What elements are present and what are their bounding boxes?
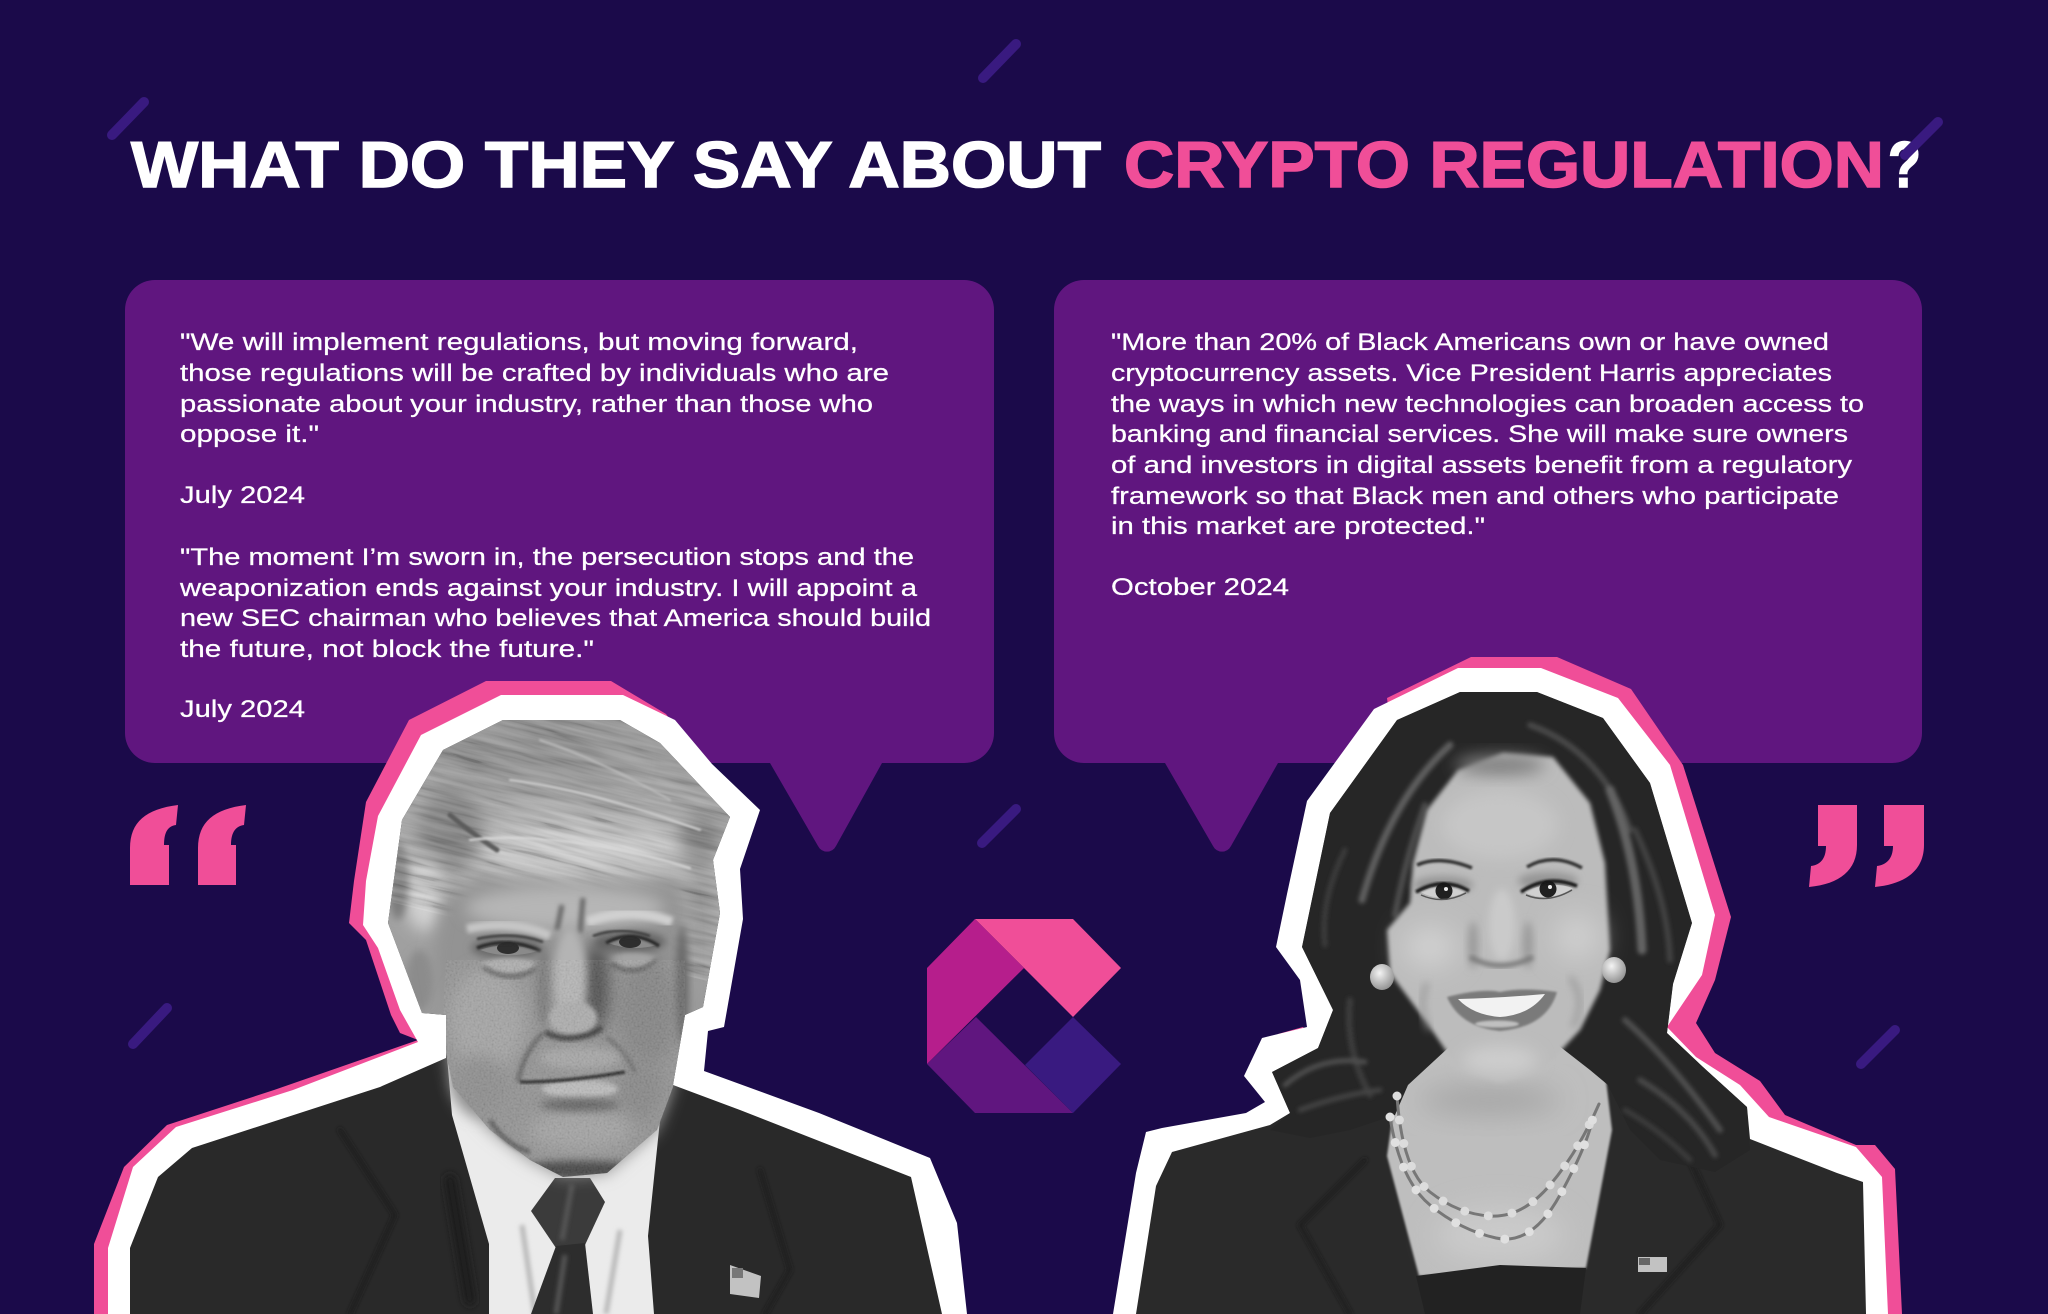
right eye [1518,872,1578,899]
quote text: first statement: those regulations will be crafted by individuals who are [180,360,889,387]
quote text: third statement: "More than 20% of Black Americans own or have owned [1111,329,1829,356]
quote text: third statement: cryptocurrency assets. Vice President Harris appreciates [1111,360,1832,387]
pink offset outline [1278,657,1902,1314]
nose [585,943,609,1031]
quote text: second statement [179,544,931,663]
eye sockets [471,937,543,959]
white sticker outline [1113,668,1888,1314]
quote text: third statement: banking and financial services. She will make sure owners [1111,421,1848,448]
pink offset outline [94,681,700,1314]
title: CRYPTO REGULATION [1124,128,1884,201]
closing quotation mark [1809,805,1924,887]
title: WHAT DO THEY SAY ABOUT [131,128,1101,201]
mouth [540,1047,620,1069]
jacket folds [340,1130,790,1314]
flag pin [730,1265,761,1298]
collar shadows [522,1225,620,1314]
date: July 2024 second: July 2024 [180,696,305,723]
photo: grayscale figure [130,720,942,1314]
quote text: second statement: new SEC chairman who believes that America should build [180,605,931,632]
logo: geometric C mark [927,919,1121,1113]
quote text: third statement [1111,329,1864,540]
face [1387,753,1610,1083]
white sticker outline [108,695,967,1314]
eyebrows [1417,861,1472,868]
date: July 2024: July 2024 [180,482,305,509]
quote text: first statement: passionate about your industry, rather than those who [180,391,873,418]
jacket lapels [1300,1160,1720,1314]
smile lines [518,1033,543,1082]
quote text: third statement: of and investors in digital assets benefit from a regulatory [1111,452,1852,479]
left eye [1413,876,1473,900]
nose [1468,921,1478,969]
tie [531,1178,605,1314]
left eye [477,942,541,976]
right eye [606,936,659,970]
dark top [1416,1265,1586,1314]
shirt [446,1045,660,1314]
frown lines [557,898,583,933]
opening quotation mark [130,805,246,885]
photo: grayscale figure [1120,680,1880,1314]
quote text: first statement [180,329,889,448]
portrait: Donald Trump cutout [94,681,967,1314]
neck and chest [1387,1030,1612,1276]
title: ? [1888,128,1921,201]
smile lines [1423,983,1430,1030]
flag pin [1638,1257,1667,1272]
quote text: third statement: the ways in which new technologies can broaden access to [1111,391,1864,418]
portrait: Kamala Harris cutout [1113,657,1902,1314]
hair [1270,692,1750,1172]
quote text: second statement: weaponization ends against your industry. I will appoint a [179,575,918,602]
speech bubble: left quotes [125,280,994,852]
date: October 2024: October 2024 [1111,574,1289,601]
face [430,877,700,1180]
quote text: first statement: oppose it." [180,421,319,448]
skin shading [465,886,665,930]
earrings [1370,957,1626,990]
eyebrows [467,925,550,936]
decorative dashes [112,44,1895,1064]
pearl necklace [1390,1096,1599,1239]
decorative dash over question mark [1905,122,1938,155]
quote text: third statement: in this market are protected." [1111,513,1485,540]
title [131,128,1921,201]
quote text: second statement: "The moment I’m sworn in, the persecution stops and the [180,544,914,571]
speech bubble: right quote [1054,280,1922,852]
hair [388,720,730,1015]
quote text: third statement: framework so that Black men and others who participate [1111,483,1839,510]
mouth and teeth [1447,990,1557,1031]
quote text: first statement: "We will implement regulations, but moving forward, [180,329,858,356]
quote text: second statement: the future, not block the future." [180,636,594,663]
